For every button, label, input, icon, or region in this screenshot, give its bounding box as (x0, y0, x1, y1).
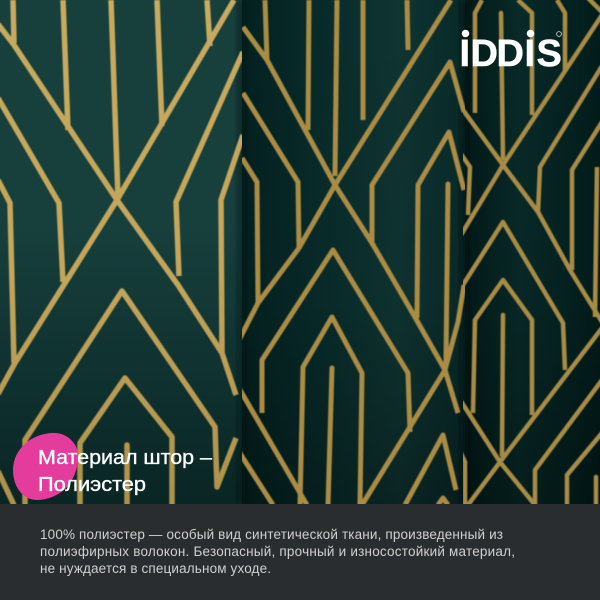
heading: material: Полиэстер (38, 474, 146, 496)
description text: 100% полиэстер — особый вид синтетической ткани, произведенный из (40, 527, 503, 542)
description text: не нуждается в специальном уходе. (40, 561, 271, 576)
gold pattern: right curtain panel (457, 0, 600, 505)
description text: полиэфирных волокон. Безопасный, прочный и износостойкий материал, (40, 544, 515, 559)
description panel (0, 504, 600, 600)
gold pattern: middle curtain panel (236, 0, 464, 505)
pink accent blob (13, 433, 78, 500)
gold pattern: left curtain panel (0, 0, 243, 505)
heading: material: Материал штор – (38, 447, 213, 469)
logo: IDDIS: IDDIS (460, 33, 562, 75)
heading: material (38, 447, 213, 496)
description text (40, 527, 515, 576)
